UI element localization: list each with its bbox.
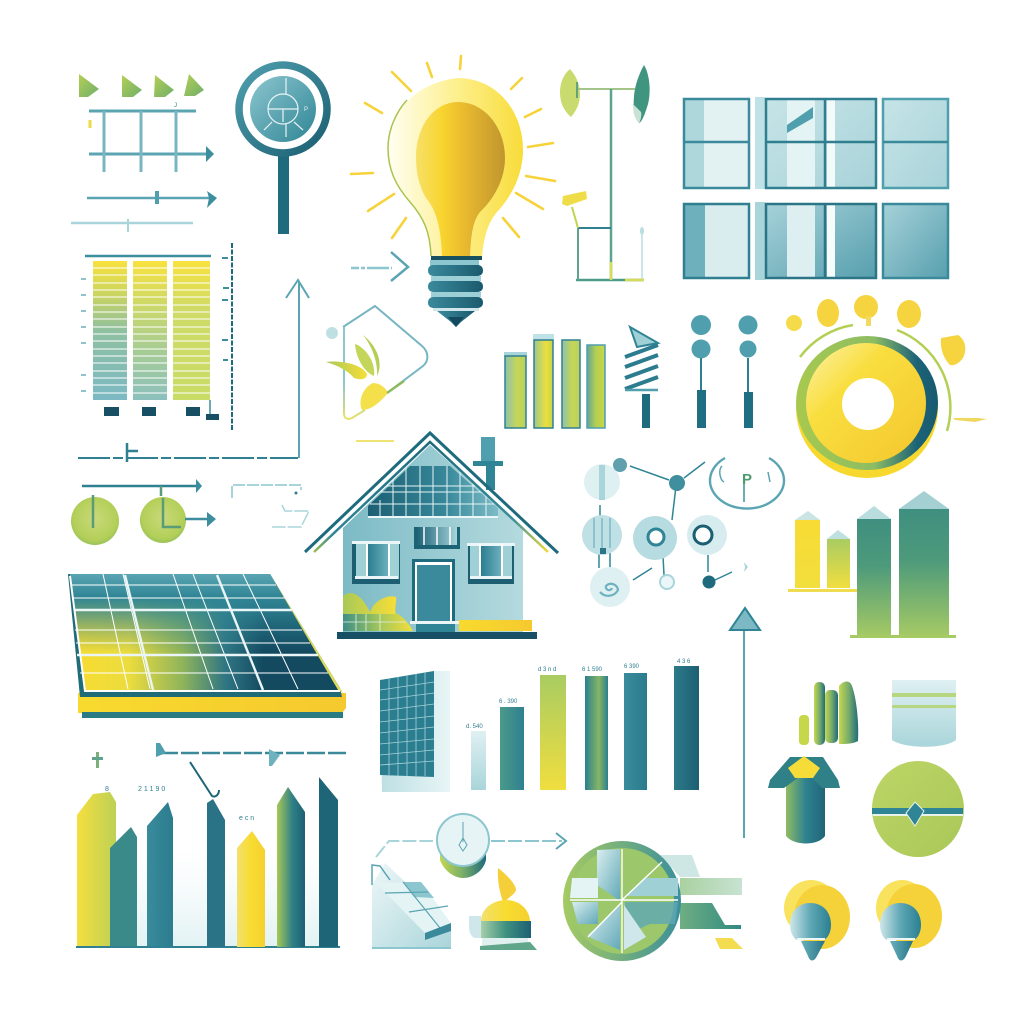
icon: spring tower	[625, 327, 658, 428]
attic window	[414, 527, 460, 549]
bar 2	[499, 699, 524, 790]
silo bar chart	[788, 491, 956, 638]
large solar panel	[68, 574, 346, 718]
bar 5: 6 390	[624, 664, 640, 670]
bar 2: 6 . 390	[499, 699, 518, 705]
icon: double-ball pin right	[738, 316, 758, 428]
icon: tag with sprout	[326, 306, 427, 441]
bar 1	[466, 724, 486, 790]
icon: wind and pole diagram	[560, 65, 650, 280]
tilted roof solar panel	[372, 863, 451, 948]
yellow-backed bulb icon right	[876, 880, 942, 960]
grid chart with leaf markers: J	[174, 103, 177, 109]
arrow: tall vertical with triangle head	[730, 608, 760, 838]
donut sun chart	[786, 295, 987, 478]
bar 4	[582, 667, 608, 790]
panel: window grid	[684, 97, 948, 280]
icon: double-ball pin left	[691, 315, 711, 428]
bottom-left arrow bar chart	[76, 777, 340, 947]
bottom-left arrow bar chart: 2 1 1 9 0	[138, 786, 165, 793]
left window	[352, 541, 400, 584]
arrow-house icon	[768, 756, 840, 844]
bar 4: 6 1 590	[582, 667, 603, 673]
circular segmented disc with bars	[563, 841, 743, 961]
bar chart: four gradient bars	[504, 334, 605, 428]
bar 1: d. 540	[466, 724, 483, 730]
window: top left	[684, 99, 749, 188]
green disc icon	[872, 761, 964, 857]
bar chart with value labels	[466, 659, 699, 790]
window: top right	[883, 99, 948, 188]
bar 5	[624, 664, 647, 790]
bar 3: d 3 n d	[538, 667, 556, 673]
bar 6	[674, 659, 699, 790]
window: bottom centre	[766, 204, 876, 278]
gauge icon with dashed arrow	[376, 814, 566, 878]
window: bottom right	[883, 204, 948, 278]
dotted vertical scale	[222, 243, 232, 430]
striped cup icon	[892, 680, 956, 747]
bar 3	[538, 667, 566, 790]
arrow: toward bulb base	[351, 252, 408, 281]
house with solar roof	[305, 433, 558, 639]
yellow-backed bulb icon left	[784, 880, 850, 960]
network diagram	[582, 458, 748, 607]
right window	[467, 543, 515, 584]
small dashed connector	[232, 485, 309, 527]
icon: light bulb	[351, 56, 555, 327]
window: top centre	[766, 99, 876, 188]
small solar panel tower	[380, 671, 450, 792]
chimney	[473, 437, 503, 490]
bar 6: 4 3 6	[677, 659, 691, 665]
icon: magnifier: P	[304, 107, 308, 113]
yellow dome icon with flame	[469, 868, 537, 950]
arrow: lower faint line	[71, 219, 193, 232]
icon: magnifier	[239, 65, 327, 234]
bottom-left arrow bar chart: e c n	[239, 815, 254, 822]
window: bottom left	[684, 204, 749, 278]
grid chart with leaf markers	[79, 74, 214, 172]
arrow: upper horizontal	[87, 191, 217, 208]
roof solar grid	[368, 466, 498, 517]
small green bars	[799, 682, 858, 745]
door	[410, 559, 460, 632]
yellow shrubs and ground panel	[343, 593, 413, 631]
small green marker	[92, 752, 103, 768]
circular gauge with P mark: P	[742, 471, 752, 488]
bottom-left arrow bar chart: 8	[105, 786, 109, 793]
dashed marker line	[156, 743, 348, 797]
circular gauge with P mark	[710, 458, 784, 509]
striped gradient bar chart	[81, 256, 219, 420]
gauges: two green circles with arrows	[71, 479, 216, 545]
L-shaped arrow	[78, 280, 309, 462]
